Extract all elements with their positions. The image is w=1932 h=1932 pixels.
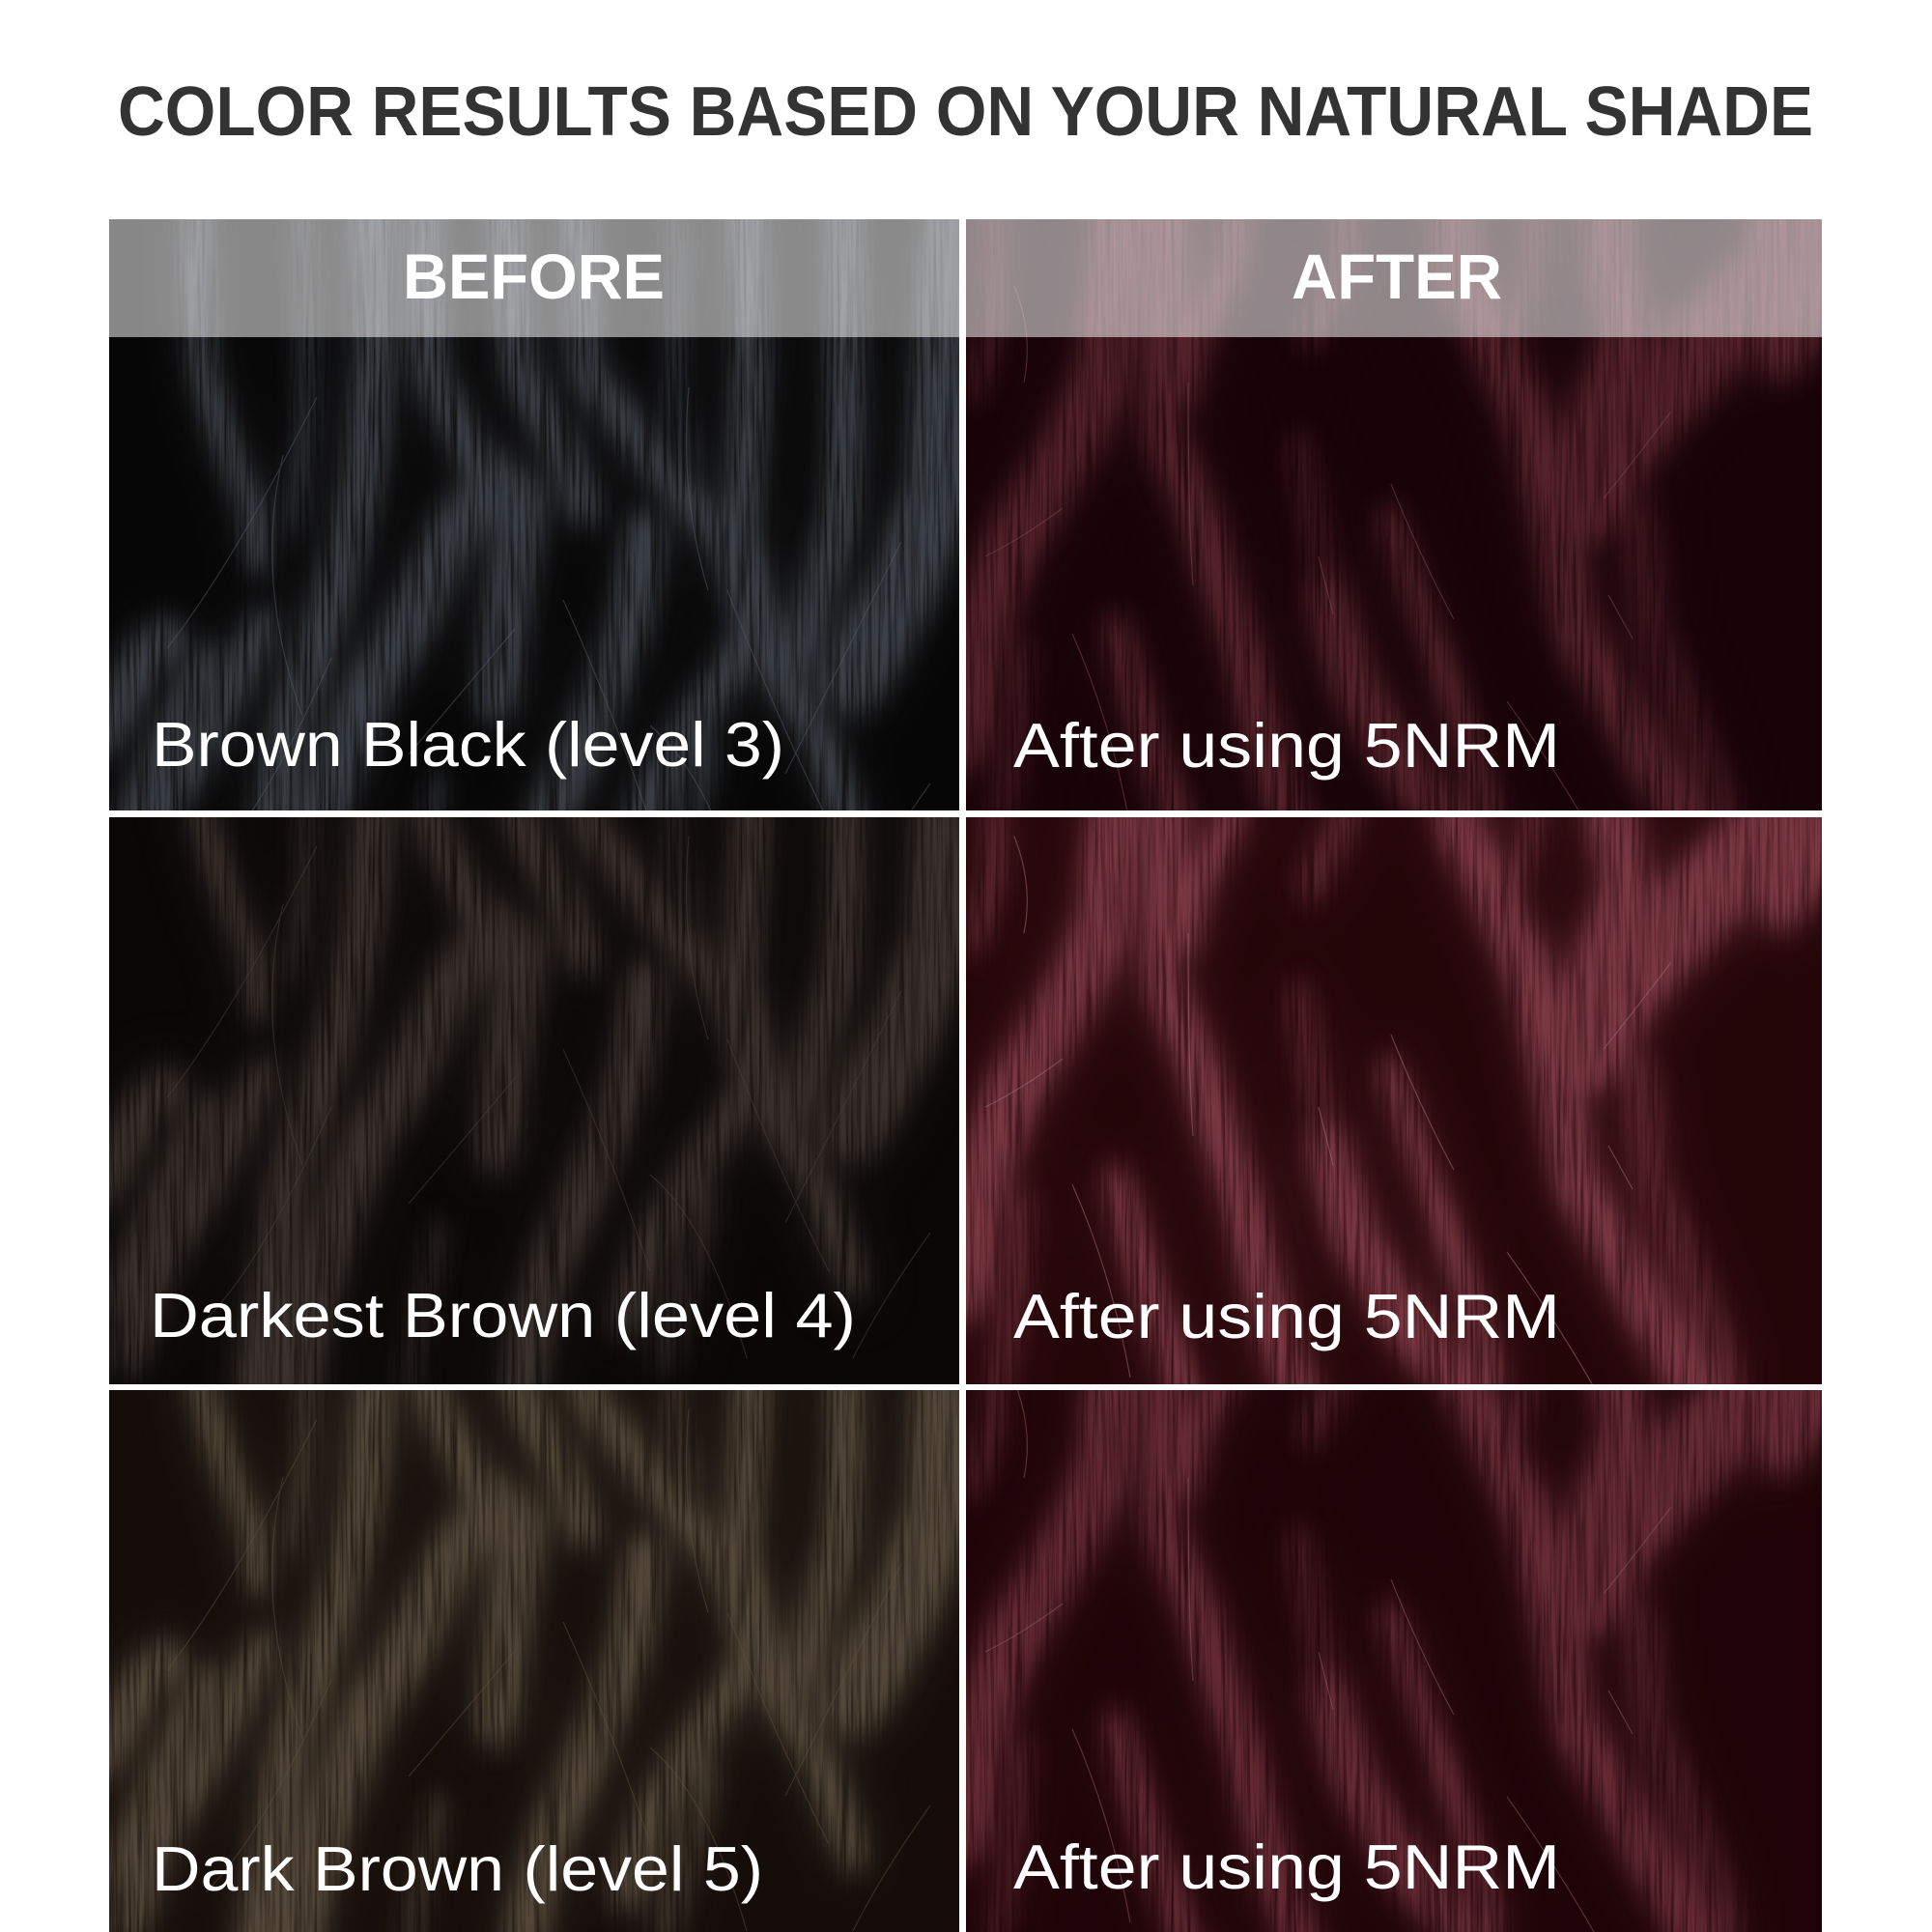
header band: before xyxy=(109,219,959,337)
label: after row 2: After using 5NRM xyxy=(1013,1281,1560,1351)
title: COLOR RESULTS BASED ON YOUR NATURAL SHADE xyxy=(118,73,1813,151)
heading: after: AFTER xyxy=(1292,241,1502,312)
label: dark brown: Dark Brown (level 5) xyxy=(152,1833,763,1904)
panel: before, brown black xyxy=(109,219,959,810)
label: after row 3: After using 5NRM xyxy=(1013,1832,1560,1902)
panel: before, dark brown xyxy=(109,1390,959,1932)
label: after row 1: After using 5NRM xyxy=(1013,710,1560,781)
panel: after, dark brown result xyxy=(966,1390,1822,1932)
label: darkest brown: Darkest Brown (level 4) xyxy=(150,1280,856,1350)
header band: after xyxy=(966,219,1822,337)
panel: before, darkest brown xyxy=(109,817,959,1384)
heading: before: BEFORE xyxy=(403,241,665,312)
label: brown black: Brown Black (level 3) xyxy=(152,709,784,780)
panel: after, darkest brown result xyxy=(966,817,1822,1384)
panel: after, brown black result xyxy=(966,219,1822,810)
